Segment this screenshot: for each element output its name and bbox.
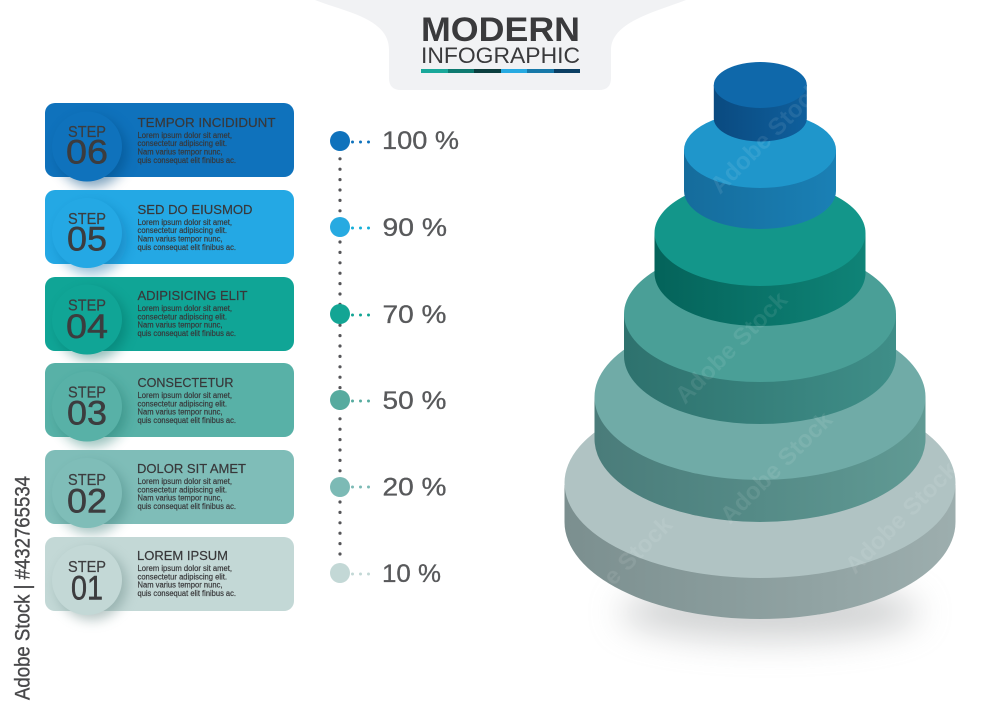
step 05 card: consectetur adipiscing elit.	[138, 226, 227, 235]
step 05 card: SED DO EIUSMOD	[138, 202, 252, 217]
timeline marker 70 percent	[330, 301, 446, 329]
step 05 card	[45, 190, 294, 274]
timeline marker 70 percent: 70 %	[382, 301, 446, 329]
step 03 card: Nam varius tempor nunc,	[138, 408, 222, 416]
step 04 card: Nam varius tempor nunc,	[138, 320, 222, 330]
step 03 card: consectetur adipiscing elit.	[138, 400, 227, 408]
timeline marker 100 percent: 100 %	[382, 127, 459, 155]
cylinder watermark: Adobe Stock	[705, 76, 828, 199]
timeline marker 100 percent	[330, 127, 459, 155]
step 04 card: STEP	[68, 298, 106, 314]
step 06 card: Lorem ipsum dolor sit amet,	[138, 131, 232, 140]
timeline marker 20 percent	[330, 474, 446, 502]
cylinder watermark: Adobe Stock	[715, 406, 838, 529]
step 01 card: LOREM IPSUM	[137, 548, 228, 563]
timeline marker 20 percent: 20 %	[382, 474, 446, 502]
step 02 card: consectetur adipiscing elit.	[138, 486, 227, 494]
step 03 card: CONSECTETUR	[138, 375, 234, 390]
step 01 card: quis consequat elit finibus ac.	[138, 589, 236, 598]
watermark: Adobe Stock	[135, 401, 258, 524]
timeline marker 90 percent: 90 %	[382, 214, 447, 242]
step 06 card: quis consequat elit finibus ac.	[138, 156, 236, 165]
step 03 card: 03	[67, 394, 107, 432]
title: MODERN	[421, 11, 580, 49]
step 03 card: quis consequat elit finibus ac.	[138, 416, 236, 425]
step 05 card: STEP	[68, 211, 106, 228]
timeline marker 90 percent	[330, 214, 447, 242]
tier 4	[654, 180, 866, 326]
step 01 card	[45, 537, 294, 620]
step 05 card: Lorem ipsum dolor sit amet,	[138, 218, 232, 227]
step 04 card: Lorem ipsum dolor sit amet,	[138, 304, 232, 313]
step 06 card: Nam varius tempor nunc,	[138, 148, 222, 156]
header panel	[315, 0, 686, 90]
step 04 card: quis consequat elit finibus ac.	[138, 329, 236, 338]
step 02 card	[45, 450, 294, 534]
step 01 card: 01	[71, 570, 103, 608]
watermark: Adobe Stock	[45, 61, 168, 184]
stock id side text: Adobe Stock | #432765534	[12, 476, 34, 700]
cylinder watermark: Adobe Stock	[555, 511, 678, 634]
timeline marker 50 percent	[330, 387, 446, 415]
title colour bar	[421, 69, 580, 73]
step 02 card: 02	[67, 482, 107, 520]
tier 6 top	[714, 62, 807, 142]
step 03 card: STEP	[68, 384, 106, 402]
timeline dotted line	[338, 159, 342, 556]
step 06 card: TEMPOR INCIDIDUNT	[138, 115, 276, 130]
step 06 card	[45, 103, 294, 187]
tier 5	[684, 112, 836, 229]
step 04 card: ADIPISICING ELIT	[138, 288, 248, 303]
cylinder watermark	[555, 76, 963, 634]
step 02 card: DOLOR SIT AMET	[137, 461, 246, 476]
tier 1 base	[564, 388, 956, 619]
step 03 card	[45, 363, 294, 447]
step 04 card: consectetur adipiscing elit.	[138, 312, 227, 322]
timeline marker 10 percent: 10 %	[382, 560, 441, 588]
timeline marker 50 percent: 50 %	[382, 387, 446, 415]
stepped cylinder pyramid	[555, 62, 963, 640]
step 03 card: Lorem ipsum dolor sit amet,	[138, 391, 232, 400]
ground shadow	[620, 584, 920, 640]
watermark: Adobe Stock	[175, 231, 298, 354]
cylinder watermark: Adobe Stock	[840, 456, 963, 579]
step 05 card: Nam varius tempor nunc,	[138, 234, 222, 244]
watermark	[45, 61, 828, 524]
step 04 card	[45, 277, 294, 360]
timeline marker 10 percent	[330, 560, 441, 588]
step 02 card: Lorem ipsum dolor sit amet,	[138, 477, 232, 486]
step 01 card: Lorem ipsum dolor sit amet,	[138, 564, 232, 573]
step 02 card: Nam varius tempor nunc,	[138, 494, 222, 502]
step 02 card: STEP	[68, 472, 106, 489]
step 01 card: STEP	[68, 559, 106, 576]
step 06 card: STEP	[68, 124, 106, 141]
step 05 card: quis consequat elit finibus ac.	[138, 243, 236, 252]
tier 2	[594, 314, 926, 522]
tier 3	[624, 246, 896, 424]
step 04 card: 04	[66, 308, 108, 346]
cylinder watermark: Adobe Stock	[670, 286, 793, 409]
watermark: Adobe Stock	[705, 76, 828, 199]
step 01 card: consectetur adipiscing elit.	[138, 572, 227, 582]
step 06 card: 06	[66, 134, 108, 172]
step 06 card: consectetur adipiscing elit.	[138, 139, 227, 148]
step 05 card: 05	[67, 220, 107, 258]
watermark: Adobe Stock	[670, 286, 793, 409]
title: INFOGRAPHIC	[421, 43, 580, 68]
step 02 card: quis consequat elit finibus ac.	[138, 502, 236, 511]
title	[421, 11, 580, 68]
step 01 card: Nam varius tempor nunc,	[138, 580, 222, 590]
